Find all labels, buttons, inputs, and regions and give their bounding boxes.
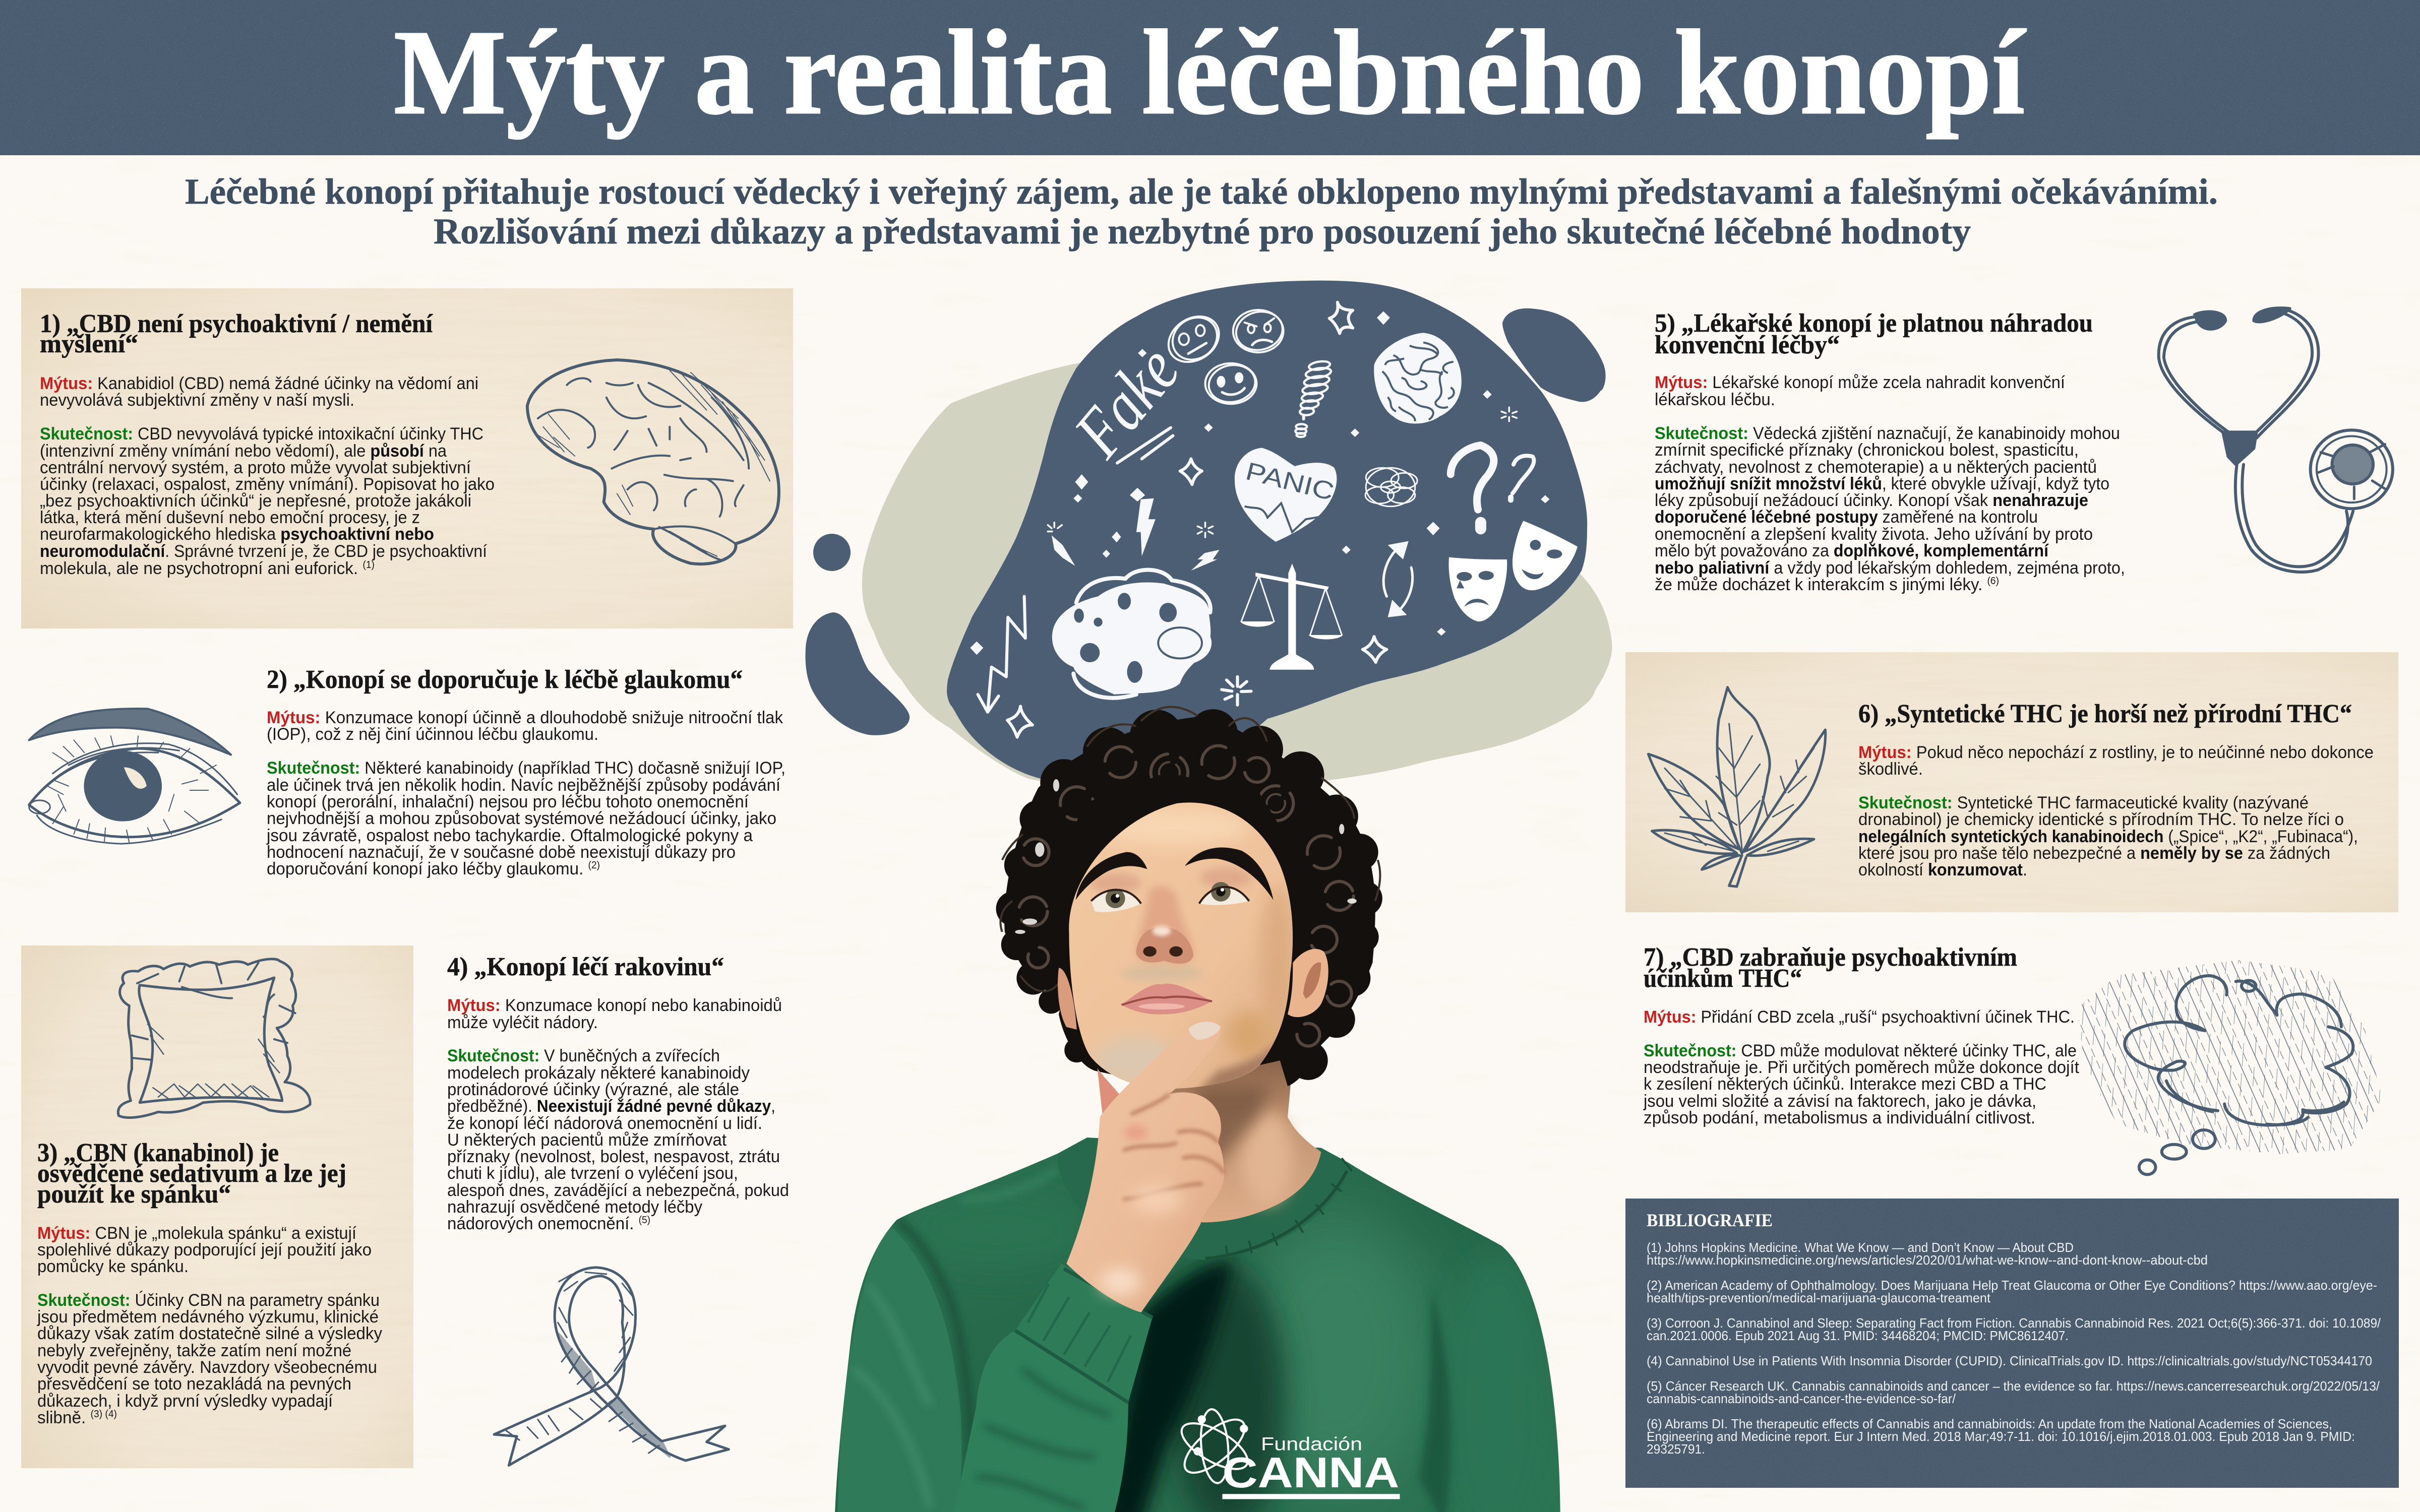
panel 5: náhrada léčby [1655,308,2393,594]
subtitle: Rozlišování mezi důkazy a představami je nezbytné pro posouzení jeho skutečné léčebné hodnoty [434,211,1971,251]
text 4: nádorových onemocnění. [447,1214,642,1233]
icon: pillow sketch [118,959,310,1117]
text 6: škodlivé. [1858,760,1923,779]
text 5: lékařskou léčbu. [1655,390,1775,409]
text 4: chuti k jídlu), ale tvrzení o vyléčení jsou, [447,1164,738,1183]
icon: small scribble ball [1365,468,1417,507]
text 1: Skutečnost: CBD nevyvolává typické intoxikační účinky THC [40,424,483,444]
left eye [1091,889,1141,912]
icon: angry face [1232,310,1287,352]
far ear [1058,968,1077,1030]
bibliography heading: BIBLIOGRAFIE [1647,1210,1773,1230]
icon: zigzag arrow [978,596,1025,712]
panel 1: CBD není psychoaktivní [40,309,779,578]
text 3: vyvodit pevné závěry. Navzdory všeobecnému [37,1358,377,1377]
text 4: může vyléčit nádory. [447,1013,598,1032]
icon: white brain [1374,333,1462,423]
text 3: důkazy však zatím dostatečně silné a výsledky [37,1324,383,1343]
subtitle: Léčebné konopí přitahuje rostoucí vědecký i veřejný zájem, ale je také obklopeno mylnými představami a falešnými očekáváními. [185,171,2218,212]
text 4 [447,996,789,1233]
sweater body [835,1138,1560,1512]
text 5: léky způsobují nežádoucí účinky. Konopí však nenahrazuje [1655,491,2088,510]
icon: cannabis leaf [1648,687,1826,887]
logo: Fundación CANNA: CANNA [1222,1448,1400,1497]
bibliography entries: (1) Johns Hopkins Medicine. What We Know — and Don’t Know — About CBD [1647,1240,2074,1255]
face [1069,802,1293,1091]
text 7: Mýtus: Přidání CBD zcela „ruší“ psychoaktivní účinek THC. [1644,1007,2075,1027]
bibliography entries: (5) Cáncer Research UK. Cannabis cannabinoids and cancer – the evidence so far. https://news.cancerresearchuk.org/2022/05/13/ [1647,1378,2380,1394]
bibliography box [1625,1199,2399,1488]
heading 3: 3) „CBN (kanabinol) je [37,1139,279,1167]
text 1 [40,374,495,578]
text 4: U některých pacientů může zmírňovat [447,1130,727,1150]
portrait: thinking man in green sweater [835,707,1560,1512]
logo: Fundación CANNA [1175,1408,1400,1499]
panel 6: syntetické THC [1648,687,2374,887]
bibliography entries: Engineering and Medicine report. Eur J Intern Med. 2018 Mar;49:7-11. doi: 10.1016/j.ejim.2018.01.003. Epub 2018 Jan 9. PMID: [1647,1429,2355,1444]
text 1: Mýtus: Kanabidiol (CBD) nemá žádné účinky na vědomí ani [40,374,478,393]
text 3: Skutečnost: Účinky CBN na parametry spánku [37,1290,380,1310]
hairline fringe over forehead [1054,773,1308,948]
dark blue main blob [947,281,1587,781]
panel 3: CBN [37,959,383,1427]
right eye [1199,882,1249,905]
text 4: Skutečnost: V buněčných a zvířecích [447,1046,720,1065]
icon: heart [1235,448,1337,542]
text 5: Mýtus: Lékařské konopí může zcela nahradit konvenční [1655,373,2065,392]
neck [1167,1060,1321,1223]
heading 5 [1655,309,2093,359]
header band [0,0,2420,155]
heading 5: 5) „Lékařské konopí je platnou náhradou [1655,309,2093,338]
text 5: záchvaty, nevolnost z chemoterapie) a u některých pacientů [1655,458,2097,477]
text 5: Skutečnost: Vědecká zjištění naznačují, že kanabinoidy mohou [1655,424,2120,443]
text 4: Mýtus: Konzumace konopí nebo kanabinoidů [447,996,782,1015]
icon: spiral exclamation mark [1295,360,1334,437]
panel 4: rakovina [447,953,789,1466]
text 2: jsou závratě, ospalost nebo tachykardie. Oftalmologické pokyny a [266,826,753,845]
text 1: centrální nervový systém, a proto může vyvolat subjektivní [40,458,471,477]
bibliography entries: health/tips-prevention/medical-marijuana-glaucoma-treament [1647,1290,1991,1305]
icon: lightning bolts [1052,498,1220,571]
text 7 [1643,1007,2079,1127]
text 2: (2) [588,860,600,871]
text 3: pomůcky ke spánku. [37,1257,189,1276]
text 1: (intenzivní změny vnímání nebo vědomí), ale působí na [40,442,447,461]
text 1: neuromodulační. Správné tvrzení je, že CBD je psychoaktivní [40,542,487,561]
text 3: důkazech, i když první výsledky vypadají [37,1392,333,1411]
beige backing blob [862,362,1612,791]
text 7: neodstraňuje je. Při určitých poměrech může dokonce dojít [1644,1058,2079,1077]
text 3: Mýtus: CBN je „molekula spánku“ a existují [37,1224,356,1243]
text 5: že může docházet k interakcím s jinými léky. [1655,575,1996,594]
lips [1121,984,1212,1015]
bibliography entries: https://www.hopkinsmedicine.org/news/articles/2020/01/what-we-know--and-dont-know--about-cbd [1647,1252,2208,1268]
text 5: nebo paliativní a vždy pod lékařským dohledem, zejména proto, [1655,558,2125,578]
heading 5: konvenční léčby“ [1655,331,1840,359]
logo: Fundación CANNA: Fundación [1261,1434,1362,1455]
text 1: látka, která mění duševní nebo emoční procesy, je z [40,508,420,527]
text 5: zmírnit specifické příznaky (chronickou bolest, spasticitu, [1655,440,2079,460]
heading 1 [40,309,433,358]
text 7: k zesílení některých účinků. Interakce mezi CBD a THC [1644,1075,2046,1094]
text 6: které jsou pro naše tělo nebezpečné a neměly by se za žádných [1858,844,2330,863]
heading 3 [37,1139,346,1209]
text 5 [1655,373,2125,594]
small bean left [806,612,910,735]
text 3: nebyly zveřejněny, takže zatím není možné [37,1341,351,1360]
bibliography entries: cannabis-cannabinoids-and-cancer-the-evidence-so-far/ [1647,1391,1956,1406]
text 2 [266,708,785,878]
text 5: doporučené léčebné postupy zaměřené na kontrolu [1655,508,2038,527]
Fake underline [1117,427,1173,463]
text 2: doporučování konopí jako léčby glaukomu. [267,859,596,878]
text 4: alespoň dnes, zavádějící a nebezpečná, pokud [447,1181,789,1200]
text 1: účinky (relaxaci, ospalost, změny vnímání). Popisovat ho jako [40,475,495,494]
text 7: Skutečnost: CBD může modulovat některé účinky THC, ale [1644,1041,2077,1060]
bibliography entries: (6) Abrams DI. The therapeutic effects of Cannabis and cannabinoids: An update from the National Academies of Sciences, [1647,1416,2332,1431]
text 2: konopí (perorální, inhalační) nejsou pro léčbu tohoto onemocnění [267,792,749,811]
icon: cycle arrows [1383,541,1413,617]
neck highlight and shadow [1197,1086,1293,1205]
text 7: jsou velmi složité a závisí na faktorech, jako je dávka, [1643,1092,2036,1111]
hair mass [996,707,1382,1086]
bibliography entries: can.2021.0006. Epub 2021 Aug 31. PMID: 34468204; PMCID: PMC8612407. [1647,1328,2069,1343]
icon: stethoscope [2159,308,2393,572]
text 4: nahrazují osvědčené metody léčby [447,1198,703,1217]
text 6: okolností konzumovat. [1858,860,2027,879]
text 6: nelegálních syntetických kanabinoidech („Spice“, „K2“, „Fubinaca“), [1858,827,2358,846]
heading 3: osvědčené sedativum a lze jej [37,1159,346,1188]
text 1: neurofarmakologického hlediska psychoaktivní nebo [40,525,434,544]
icon: hatched thought cloud [2077,960,2382,1174]
text 4: (5) [639,1215,650,1226]
text 1: molekula, ale ne psychotropní ani euforick. [40,559,370,578]
text 2: (IOP), což z něj činí účinnou léčbu glaukomu. [267,725,598,744]
text 5: (6) [1987,576,1999,587]
hand with finger on chin [1066,1020,1225,1312]
text 3: (3) (4) [90,1409,117,1420]
small blob top right [1502,308,1606,402]
bibliography entries: (3) Corroon J. Cannabinol and Sleep: Separating Fact from Fiction. Cannabis Cannabinoid Res. 2021 Oct;6(5):366-371. doi: 10.1089/ [1647,1315,2381,1331]
text 1: nevyvolává subjektivní změny v naší mysli. [40,391,354,410]
panel 2: glaukom [29,665,785,878]
PANIC word on heart: PANIC [1243,457,1337,506]
icon: sparkles [970,311,1550,655]
nose [1136,886,1193,964]
text 1: „bez psychoaktivních účinků“ je nepřesné, protože jakákoli [40,491,471,511]
bibliography entries: (2) American Academy of Ophthalmology. Does Marijuana Help Treat Glaucoma or Other Eye Conditions? https://www.aao.org/eye- [1647,1278,2377,1293]
text 4: protinádorové účinky (výrazné, ale stále [447,1080,739,1099]
text 2: Skutečnost: Některé kanabinoidy (například THC) dočasně snižují IOP, [267,759,785,778]
central thought bubble graphic [806,281,1612,791]
text 1: (1) [362,559,375,571]
bibliography entries [1647,1240,2381,1457]
text 4: že konopí léčí nádorová onemocnění u lidí. [447,1114,762,1133]
title: Mýty a realita léčebného konopí [394,5,2026,139]
bibliography entries: 29325791. [1647,1441,1705,1457]
text 3: přesvědčení se toto nezakládá na pevných [37,1374,351,1394]
text 6: Mýtus: Pokud něco nepochází z rostliny, je to neúčinné nebo dokonce [1858,743,2374,762]
bibliography entries: (4) Cannabinol Use in Patients With Insomnia Disorder (CUPID). ClinicalTrials.gov ID. https://clinicaltrials.gov/study/NCT05344170 [1647,1353,2372,1368]
text 5: umožňují snížit množství léků, které obvykle užívají, když tyto [1655,474,2109,493]
icon: smiling face [1205,363,1259,404]
icon: large white scribble cloud [1052,570,1211,698]
heading 2: 2) „Konopí se doporučuje k léčbě glaukomu“ [267,665,743,694]
text 2: nejvhodnější a mohou způsobovat systémové nežádoucí účinky, jako [267,809,776,828]
doodle icons inside bubble [970,302,1578,737]
text 2: ale účinek trvá jen několik hodin. Navíc nejběžnější způsoby podávání [267,776,780,795]
panel 7: CBD a THC [1643,943,2382,1174]
text 4: příznaky (nevolnost, bolest, nespavost, ztrátu [447,1147,780,1166]
heart pulse line [1245,503,1325,532]
text 4: modelech prokázaly některé kanabinoidy [447,1063,750,1083]
icon: eye sketch [29,709,240,844]
hair curls [1018,746,1354,1046]
text 5: onemocnění a zlepšení kvality života. Jeho užívání by proto [1655,525,2093,544]
heading 1: myšlení“ [40,330,138,358]
near ear [1288,949,1328,1017]
heading 1: 1) „CBD není psychoaktivní / nemění [40,309,433,338]
text 3: spolehlivé důkazy podporující její použití jako [37,1240,372,1259]
heading 7 [1644,943,2017,993]
heading 3: použít ke spánku“ [37,1180,231,1209]
panel backgrounds: tan paper cards [21,288,2398,1468]
forearm sleeve [951,1264,1153,1512]
text 5: mělo být považováno za doplňkové, komplementární [1655,541,2049,560]
heading 4: 4) „Konopí léčí rakovinu“ [447,953,724,981]
icon: balance scales [1240,563,1343,670]
eyebrows [1076,848,1274,900]
atom mark [1175,1408,1254,1484]
text 3: slibně. [37,1408,88,1427]
text 6: dronabinol) je chemicky identické s přírodním THC. To nelze říci o [1858,810,2344,829]
icon: awareness ribbon [494,1268,729,1466]
subtitle [185,171,2218,251]
text 6 [1858,743,2374,879]
icon: spark bursts [1048,407,1517,705]
icon: theatre masks [1448,521,1578,621]
collar [1058,1138,1352,1260]
Fake word: Fake [1059,332,1194,472]
icon: question marks [1450,446,1534,529]
text 2: hodnocení naznačují, že v současné době neexistují důkazy pro [267,843,736,862]
text 2: Mýtus: Konzumace konopí účinně a dlouhodobě snižuje nitrooční tlak [267,708,783,727]
heading 7: účinkům THC“ [1644,964,1802,993]
small oval left [813,534,851,571]
icon: outline stars [1007,302,1386,737]
icon: brain sketch [527,360,779,564]
heading 7: 7) „CBD zabraňuje psychoaktivním [1644,943,2017,972]
text 4: předběžné). Neexistují žádné pevné důkazy, [447,1097,775,1116]
text 3: jsou předmětem nedávného výzkumu, klinické [37,1307,379,1327]
icon: confused face [1161,313,1227,365]
text 6: Skutečnost: Syntetické THC farmaceutické kvality (nazývané [1858,793,2309,812]
text 3 [37,1224,383,1427]
heading 6: 6) „Syntetické THC je horší než přírodní THC“ [1858,700,2352,728]
text 7: způsob podání, metabolismus a individuální citlivost. [1644,1108,2035,1127]
